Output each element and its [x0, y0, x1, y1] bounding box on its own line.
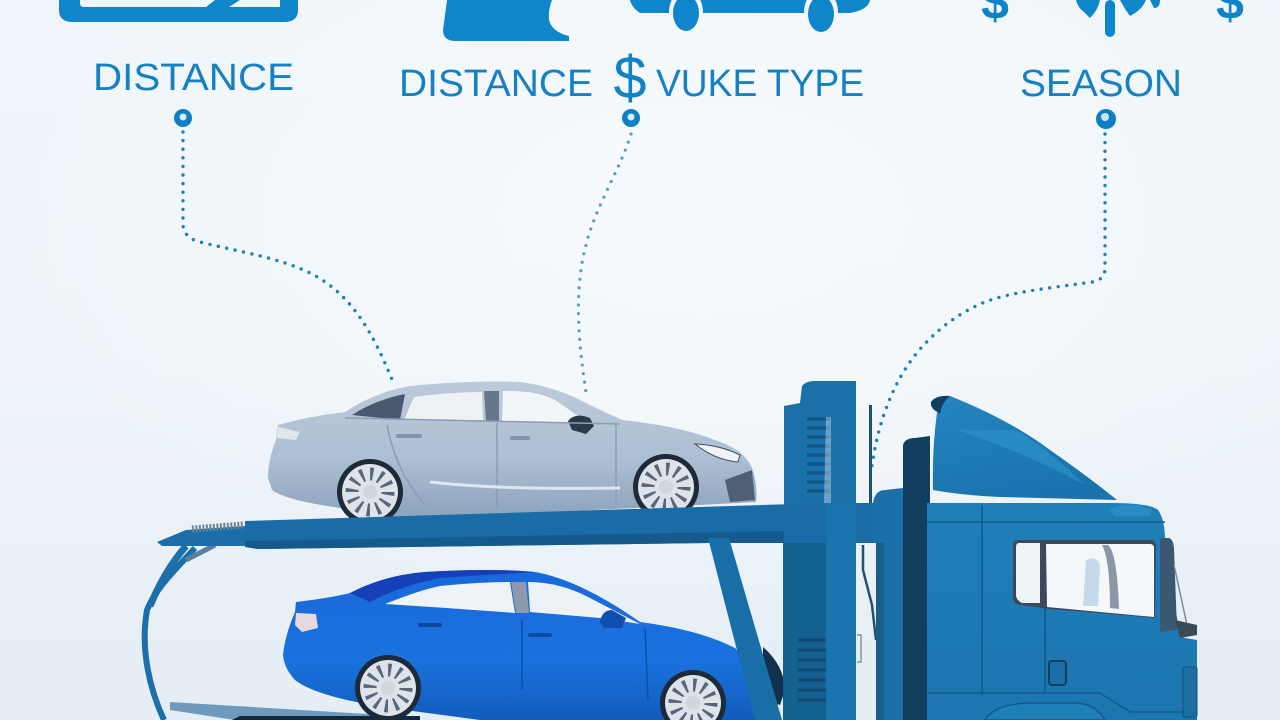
- upper tower: [784, 381, 856, 510]
- blue car roof highlight: [350, 570, 535, 602]
- silver car mirror: [568, 416, 594, 434]
- silver car body: [268, 382, 756, 519]
- cab panel lines: [927, 505, 1195, 712]
- truck cab: [927, 503, 1197, 720]
- silver car rear glass: [352, 394, 405, 420]
- silver car pillar: [484, 391, 499, 421]
- marker dot left: [174, 109, 192, 127]
- mirror base: [1175, 620, 1197, 638]
- silver car lower trim: [430, 482, 620, 488]
- window frame: [1013, 540, 1156, 618]
- door handle: [1049, 661, 1066, 685]
- headlight: [1183, 667, 1197, 717]
- rear gap hoses: [857, 545, 876, 662]
- icon: large dollar: $: [614, 44, 646, 111]
- dotted connector centre: [578, 134, 631, 392]
- label: distance left: DISTANCE: [93, 57, 294, 99]
- blue car door lines: [522, 620, 648, 700]
- blue car handles: [420, 625, 550, 635]
- cab rear window: [1016, 543, 1040, 603]
- silver car: [268, 382, 756, 525]
- fairing highlight: [958, 430, 1085, 485]
- icon: palm season: [1076, 0, 1160, 37]
- icon: road tray: [59, 0, 298, 22]
- silver car rear wheel: [337, 459, 403, 518]
- blue car front wheel: [660, 670, 726, 720]
- deck main beam: [245, 503, 885, 549]
- wheel arch: [985, 703, 1105, 720]
- mirror arm: [1160, 538, 1177, 632]
- blue car pillar: [511, 582, 529, 613]
- silver car headlight: [695, 444, 740, 462]
- lower tower: [783, 540, 827, 720]
- marker dot centre: [622, 109, 640, 127]
- cab main window: [1046, 544, 1154, 617]
- blue car rear wheel: [355, 655, 421, 720]
- lower rear arm: [145, 545, 215, 720]
- blue car rear window: [385, 582, 515, 613]
- silver car front wheel: [633, 454, 699, 509]
- label: distance centre: DISTANCE: [399, 63, 593, 105]
- icon: car top: [630, 0, 870, 34]
- icon: centre block: [443, 0, 569, 41]
- tower vents: [807, 419, 830, 491]
- label: season: SEASON: [1020, 63, 1182, 105]
- deck left tip: [157, 526, 245, 546]
- window pillar: [1102, 545, 1119, 609]
- silver car rear window: [404, 392, 483, 420]
- silver car taillight: [277, 427, 300, 440]
- blue car front window: [528, 582, 640, 624]
- lower tower vents: [798, 640, 826, 700]
- lower deck: [170, 702, 420, 720]
- diagonal strut: [708, 538, 782, 720]
- silver car grille: [725, 470, 755, 502]
- deck lower shadow: [245, 531, 784, 549]
- dotted connector right: [871, 134, 1105, 472]
- cab fairing: [931, 396, 1117, 500]
- upper deck: [157, 503, 885, 549]
- cab back column: [873, 436, 930, 720]
- marker dot right: [1096, 109, 1116, 129]
- blue car mirror: [600, 610, 626, 628]
- silver car front window: [502, 391, 590, 424]
- silver car handles: [398, 436, 528, 438]
- label: vehicle type: VUKE TYPE: [656, 63, 864, 105]
- dotted connector left: [183, 132, 393, 382]
- tower column: [826, 503, 856, 720]
- blue car: [283, 570, 785, 720]
- blue car taillight: [295, 613, 318, 632]
- thin pole: [869, 405, 872, 505]
- deck spring: [192, 525, 243, 529]
- silver car door lines: [345, 418, 620, 510]
- mirror line: [1174, 565, 1187, 625]
- blue car body: [283, 570, 775, 720]
- cab roof visor: [1108, 505, 1152, 516]
- cab body: [927, 503, 1197, 720]
- fairing nose shadow: [931, 396, 950, 414]
- tower vent highlights: [824, 417, 831, 503]
- reflection in window: [1083, 558, 1100, 606]
- blue car dark wheel arch: [763, 647, 785, 705]
